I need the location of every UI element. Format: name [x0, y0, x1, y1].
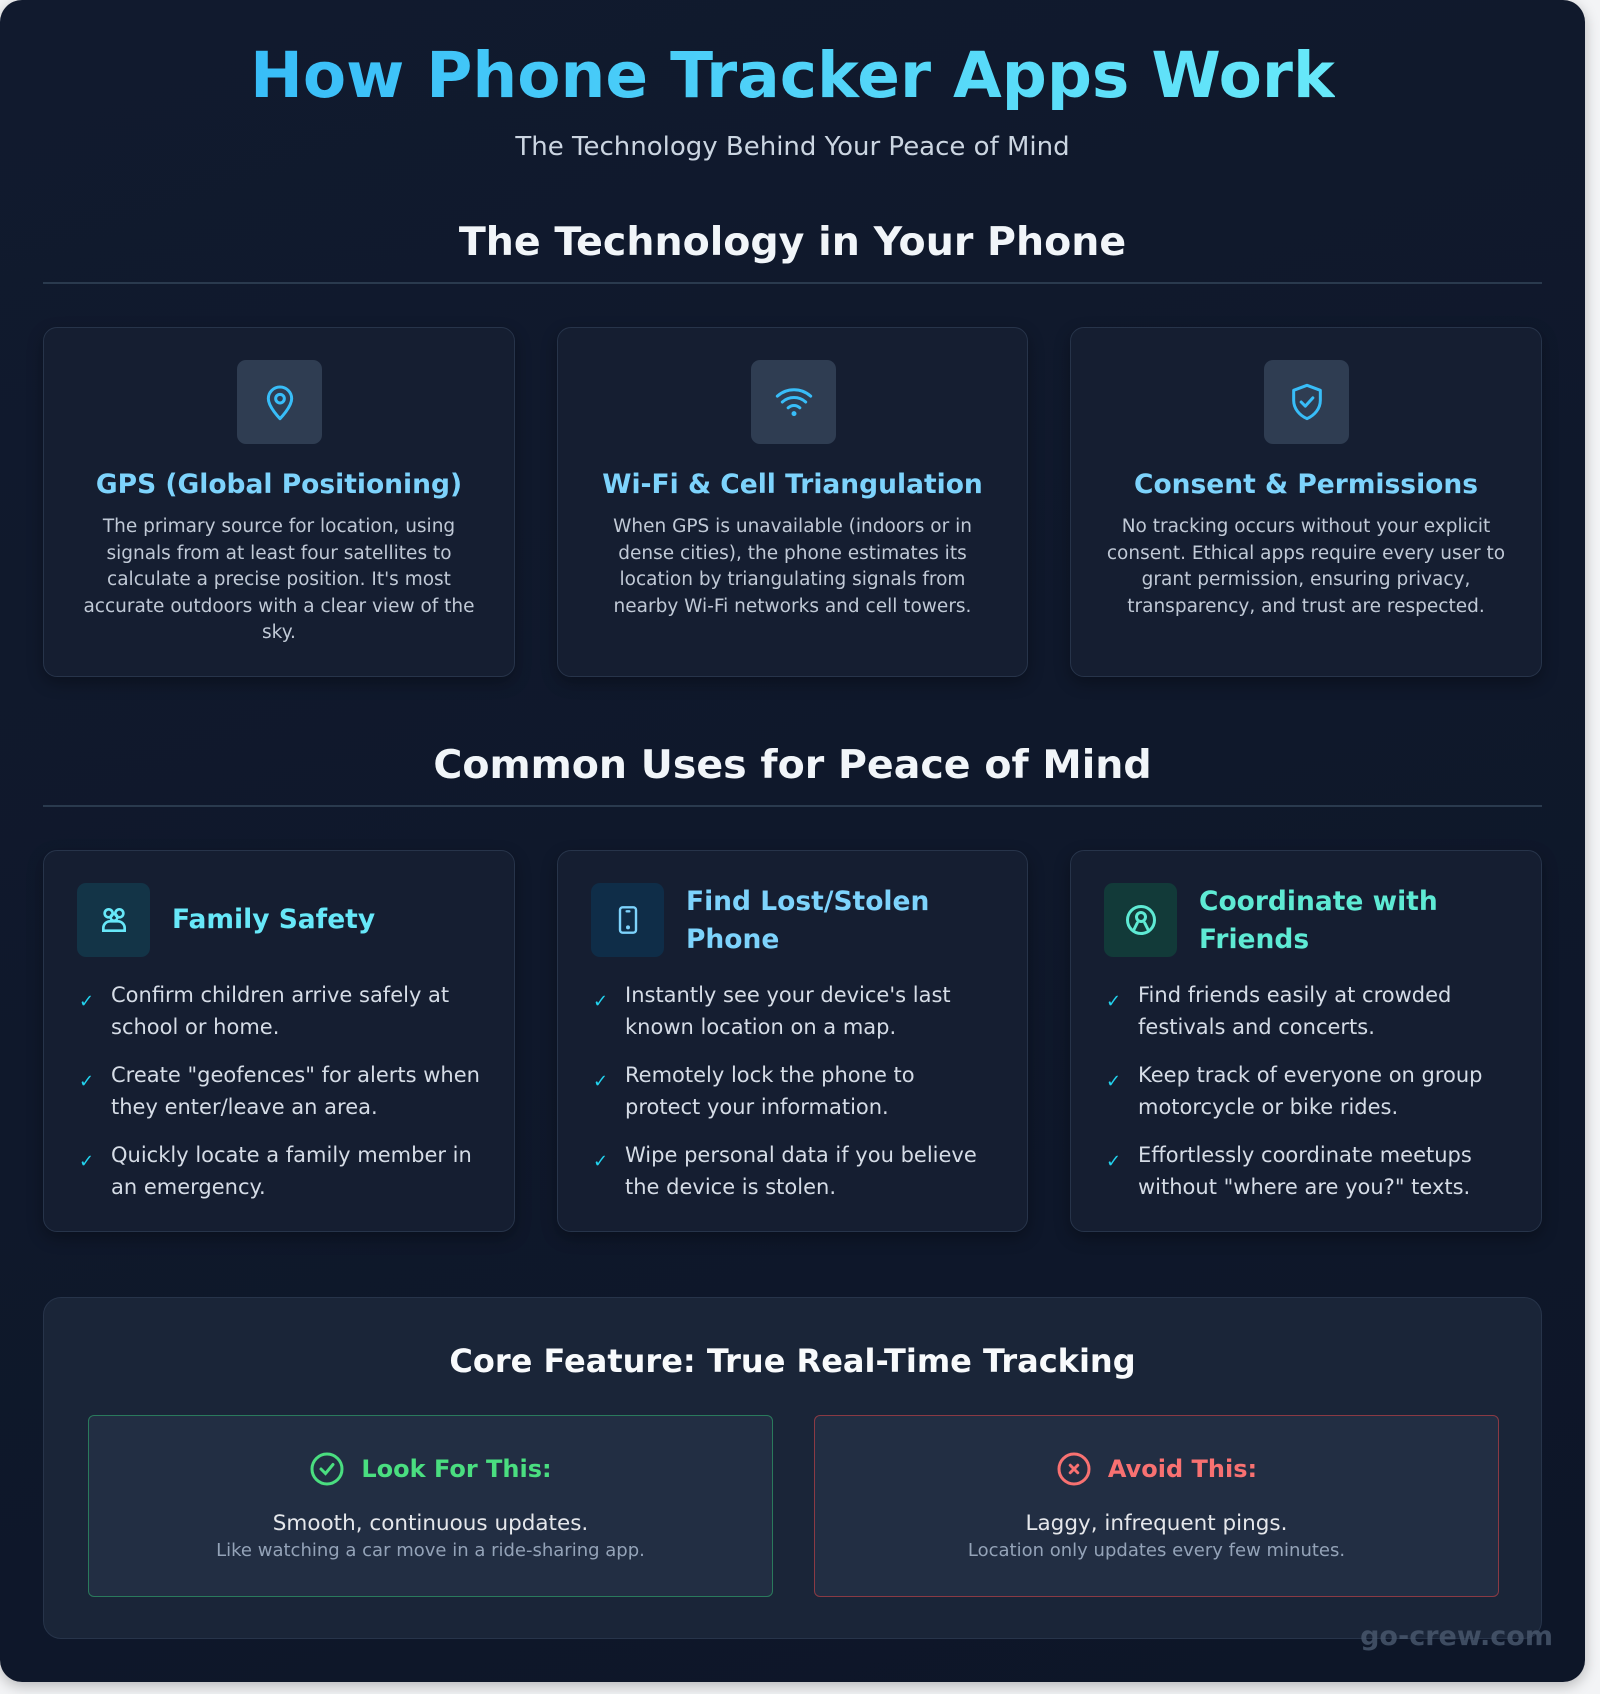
- bullet list: Confirm children arrive safely at school or home.: [111, 983, 449, 1038]
- heading: Coordinate with: [1199, 886, 1438, 917]
- heading with check icon: Look For This:: [361, 1455, 552, 1483]
- core title: Core Feature: True Real-Time Tracking: [449, 1342, 1136, 1380]
- bullet list: Keep track of everyone on group motorcycle or bike rides.: [1138, 1063, 1483, 1118]
- heading: [1199, 886, 1438, 955]
- bullet list: Effortlessly coordinate meetups without "where are you?" texts.: [1138, 1143, 1472, 1198]
- heading with check icon: [310, 1452, 552, 1486]
- card title: Consent & Permissions: [1134, 469, 1478, 500]
- card title: Wi-Fi & Cell Triangulation: [602, 469, 983, 500]
- heading: uses section: Common Uses for Peace of Mind: [433, 742, 1152, 788]
- card text: No tracking occurs without your explicit consent. Ethical apps require every user to grant permission, ensuring privacy, transparency, and trust are respected.: [1107, 516, 1505, 616]
- callout: avoid this: Location only updates every few minutes.: [968, 1540, 1345, 1561]
- bullet list: Instantly see your device's last known location on a map.: [625, 983, 951, 1038]
- icon: family: [77, 883, 150, 957]
- bullet list: Find friends easily at crowded festivals and concerts.: [1138, 983, 1451, 1038]
- icon: phone: [591, 883, 664, 957]
- heading with x icon: Avoid This:: [1108, 1455, 1257, 1483]
- watermark: go-crew.com: [1360, 1621, 1553, 1652]
- bullet list: Remotely lock the phone to protect your information.: [625, 1063, 915, 1118]
- bullet list: [596, 983, 977, 1198]
- heading: [686, 886, 929, 955]
- callout: avoid this: Laggy, infrequent pings.: [1026, 1511, 1287, 1536]
- bullet list: Wipe personal data if you believe the device is stolen.: [625, 1143, 977, 1198]
- callout: avoid this: [814, 1415, 1499, 1597]
- heading: technology section: The Technology in Your Phone: [459, 219, 1126, 265]
- panel: Coordinate with Friends: [1070, 850, 1542, 1232]
- card title: GPS (Global Positioning): [96, 469, 462, 500]
- callout: look for this: [88, 1415, 773, 1597]
- heading: Friends: [1199, 924, 1309, 955]
- icon: location pin: [237, 360, 322, 444]
- panel: GPS: [43, 327, 515, 677]
- icon: wifi: [751, 360, 836, 444]
- bullet list: [1108, 983, 1483, 1198]
- icon: shield: [1264, 360, 1349, 444]
- heading: Find Lost/Stolen: [686, 886, 929, 917]
- icon: friends: [1104, 883, 1177, 957]
- panel: Wi-Fi: [557, 327, 1028, 677]
- panel: Consent: [1070, 327, 1542, 677]
- panel: core feature: [43, 1297, 1542, 1639]
- callout: look for this: Smooth, continuous updates.: [273, 1511, 588, 1536]
- subtitle: The Technology Behind Your Peace of Mind: [515, 132, 1070, 162]
- heading with x icon: [1058, 1452, 1257, 1486]
- callout: look for this: Like watching a car move in a ride-sharing app.: [216, 1540, 645, 1561]
- card text: When GPS is unavailable (indoors or in dense cities), the phone estimates its location by triangulating signals from nearby Wi-Fi networks and cell towers.: [613, 516, 972, 616]
- bullet list: [82, 983, 480, 1198]
- bullet list: Create "geofences" for alerts when they enter/leave an area.: [111, 1063, 480, 1118]
- panel: Find Lost Phone: [557, 850, 1028, 1232]
- panel: Family Safety: [43, 850, 515, 1232]
- title: How Phone Tracker Apps Work: [250, 39, 1335, 112]
- card text: The primary source for location, using signals from at least four satellites to calculate a precise position. It's most accurate outdoors with a clear view of the sky.: [83, 516, 475, 643]
- heading: Family Safety: [172, 904, 375, 935]
- heading: Phone: [686, 924, 779, 955]
- bullet list: Quickly locate a family member in an emergency.: [111, 1143, 472, 1198]
